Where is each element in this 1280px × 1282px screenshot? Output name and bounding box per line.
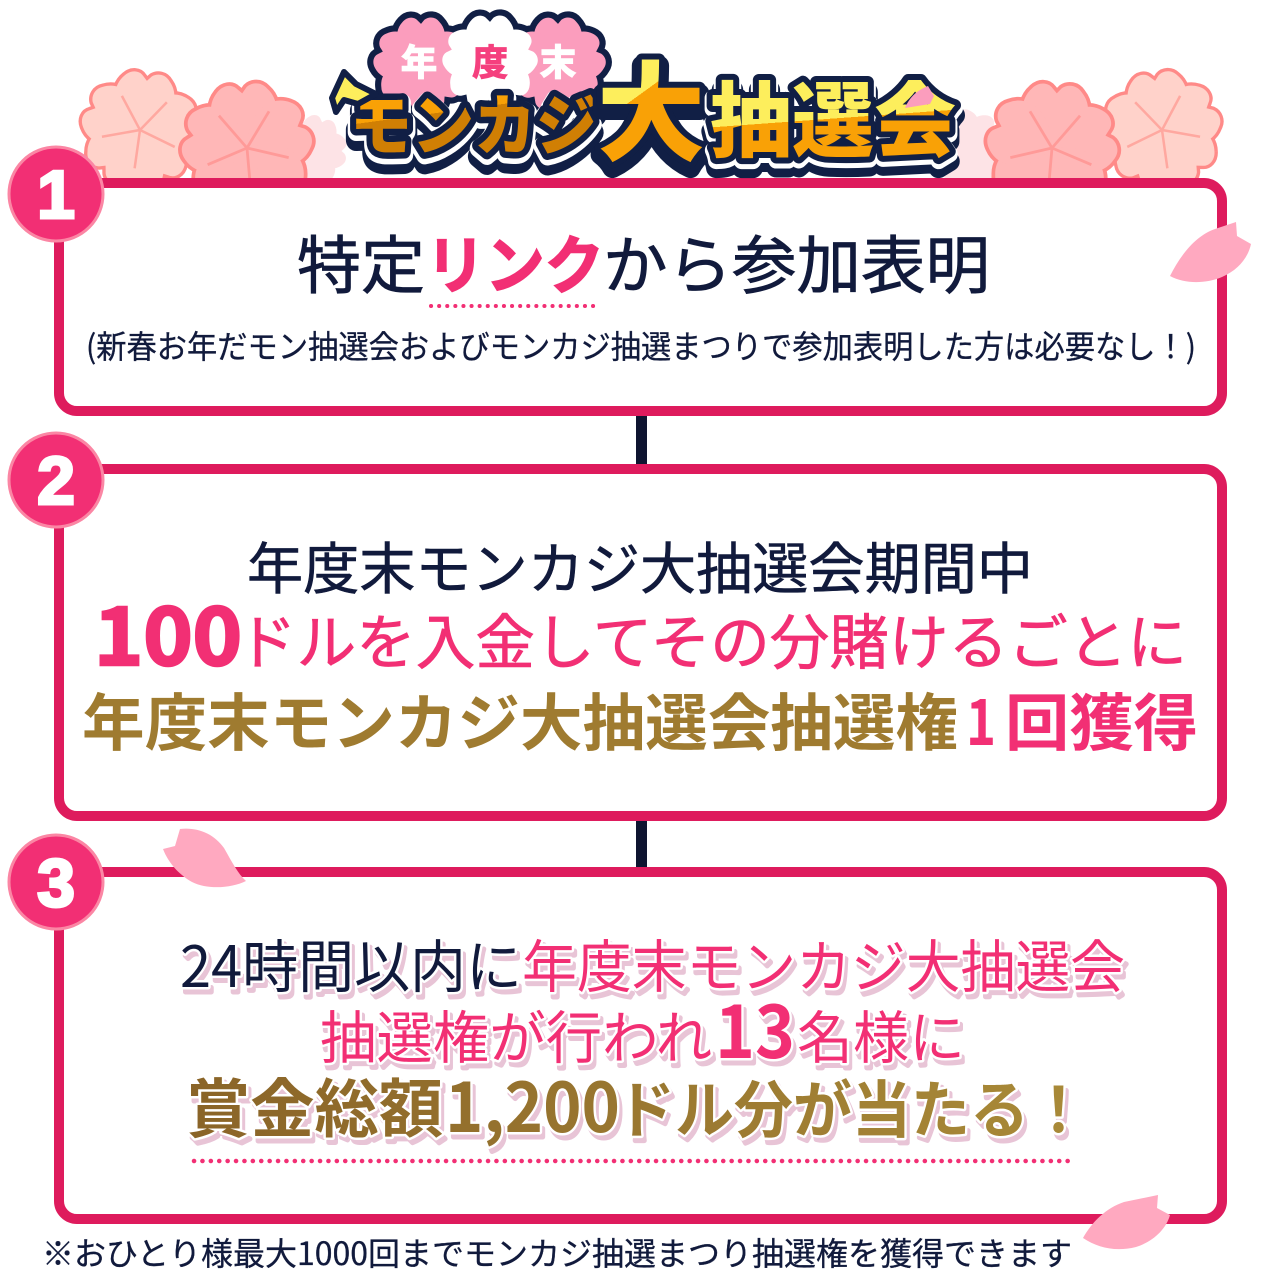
panel 3 line 2 start: 抽選権が行われ [320, 993, 712, 1075]
logo: モンカジ lettering: モンカジ [350, 84, 598, 180]
panel 2 line 2: ドルを入金してその分賭けるごとに [237, 595, 1187, 682]
panel 1 note: (新春お年だモン抽選会およびモンカジ抽選まつりで参加表明した方は必要なし！) [86, 322, 1196, 368]
panel 2 line 3: 年度末モンカジ大抽選会抽選権 [82, 673, 958, 763]
panel 3 text [180, 922, 1125, 1152]
logo: モンカジ lettering: モンカジ [350, 76, 598, 172]
connector between panels 1 and 2 [636, 416, 647, 464]
footnote: ※おひとり様最大1000回までモンカジ抽選まつり抽選権を獲得できます [42, 1229, 1072, 1275]
logo: 抽選会 lettering: 抽選会 [710, 65, 956, 184]
petal: top right [1170, 222, 1251, 282]
logo: sakura badge 年度末: 年 [401, 34, 437, 86]
logo: sakura badge 年度末: 末 [540, 34, 576, 86]
logo: 大 lettering: 大 [597, 34, 705, 190]
panel 1 frame [59, 183, 1222, 411]
logo: モンカジ lettering: モンカジ [350, 73, 598, 169]
panel 3 number 13: 13 [715, 974, 795, 1079]
panel 3 line 2 end: 名様に [797, 993, 965, 1075]
logo: 大 lettering: 大 [597, 28, 705, 184]
panel 1 heading: 特定 [297, 216, 425, 307]
panel 2 line 1: 年度末モンカジ大抽選会期間中 [247, 525, 1033, 606]
logo: sakura badge 年度末: 度 [472, 34, 508, 86]
panel 3 amount: 1,200 [445, 1053, 620, 1152]
logo: 抽選会 lettering: 抽選会 [710, 55, 956, 174]
panel 3 line 3 end: ドル分が当たる！ [616, 1060, 1088, 1150]
step badge 2 [9, 433, 103, 527]
step badge 3: 3 [37, 845, 75, 921]
panel 3 frame [59, 872, 1222, 1219]
panel 1 heading: リンク [426, 216, 604, 307]
panel 2 count 1: 1 [966, 673, 996, 763]
panel 3 line 3 start: 賞金総額 [186, 1059, 443, 1151]
decoration: left cherry blossoms [78, 68, 346, 178]
panel 1 heading: から参加表明 [603, 216, 990, 307]
panel 2 amount 100: 100 [94, 576, 242, 688]
panel 2 line 3 end: 回獲得 [1005, 673, 1198, 763]
logo: 抽選会 lettering: 抽選会 [710, 58, 956, 177]
logo: sakura badge 年度末 [369, 15, 610, 116]
decoration: right cherry blossoms [944, 68, 1224, 178]
panel 1 dotted underline [431, 304, 600, 308]
step badge 2: 2 [37, 443, 75, 519]
step badge 3 [9, 835, 103, 929]
panel 3 dotted underline [194, 1159, 1068, 1163]
petal: middle left [163, 829, 246, 887]
step badge 1: 1 [37, 157, 75, 233]
title logo [332, 15, 956, 190]
connector between panels 2 and 3 [636, 821, 647, 867]
petal: bottom right [1083, 1195, 1170, 1249]
panel 3 line 1 end: 年度末モンカジ大抽選会 [522, 922, 1125, 1004]
panel 1 heading [297, 216, 990, 307]
panel 3 line 1 start: 24時間以内に [180, 922, 522, 1004]
panel 2 frame [59, 469, 1222, 816]
panel 2 text [82, 525, 1198, 763]
logo: yellow bat ear [332, 72, 376, 112]
step badge 1 [9, 147, 103, 241]
